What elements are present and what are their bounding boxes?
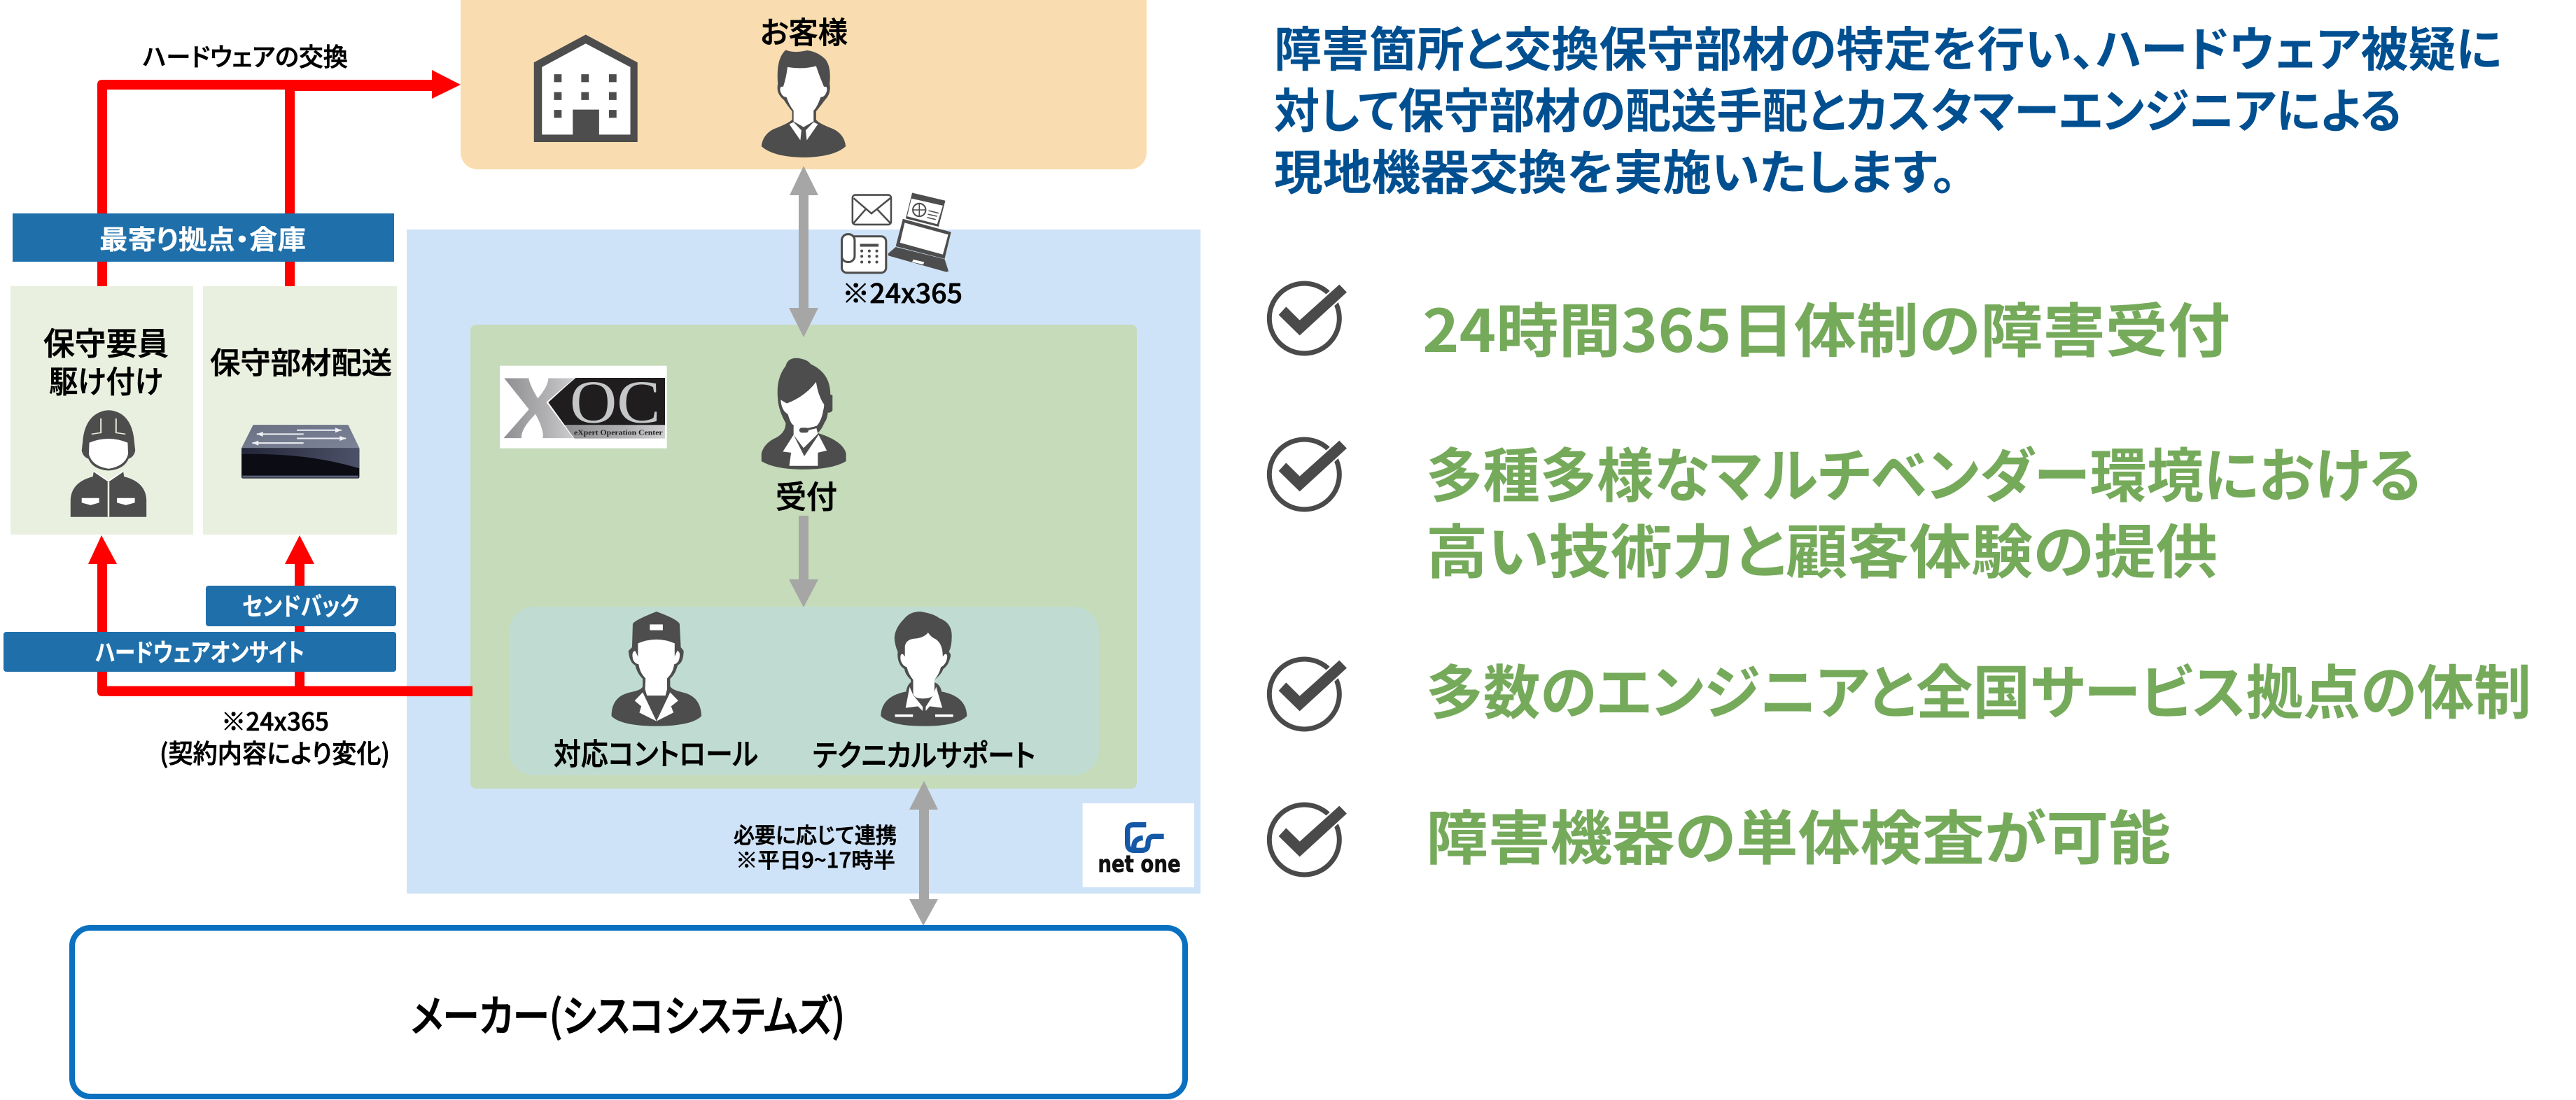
text: parts delivery: 保守部材配送: [210, 339, 392, 383]
heading: service summary: 障害箇所と交換保守部材の特定を行い、ハードウェア被疑に: [1274, 11, 2502, 80]
note: vendor cooperation: ※平日9~17時半: [736, 843, 895, 874]
icon: field worker: [71, 410, 146, 517]
icon: network switch: [241, 425, 359, 479]
icons: contact channels: [842, 193, 951, 273]
text: multi-vendor capability: 多種多様なマルチベンダー環境における: [1426, 430, 2421, 514]
note: onsite hours: [160, 703, 390, 770]
logo: net one: [1083, 803, 1194, 887]
bar: hardware onsite: ハードウェアオンサイト: [95, 633, 304, 669]
item: engineers and service bases: [1269, 647, 2531, 731]
text: device inspection: 障害機器の単体検査が可能: [1426, 792, 2171, 877]
bar: nearest base and warehouse: 最寄り拠点・倉庫: [99, 218, 306, 257]
icon: check: [1269, 439, 1347, 509]
panel: field engineer dispatch: [10, 286, 193, 535]
item: multi-vendor capability: [1269, 430, 2421, 591]
arrow: reception to support: [789, 516, 818, 607]
bar: nearest base and warehouse: [13, 213, 394, 262]
bar: send back: [206, 586, 396, 626]
icon: telephone: [842, 234, 886, 273]
note: vendor cooperation: 必要に応じて連携: [734, 818, 897, 849]
note: vendor cooperation: [734, 818, 897, 874]
panel: customer: [461, 0, 1147, 169]
panel: maker: メーカー(シスコシステムズ): [411, 981, 845, 1044]
text: multi-vendor capability: 高い技術力と顧客体験の提供: [1426, 506, 2218, 591]
icon: check: [1269, 659, 1347, 729]
panel: replacement parts delivery: [203, 286, 397, 535]
logo: net one: net one: [1098, 850, 1181, 877]
reception label: 受付: [776, 472, 837, 517]
panel: XOC operation center: [470, 325, 1137, 789]
logo: XOC: [500, 366, 667, 449]
control label: 対応コントロール: [554, 731, 758, 774]
item: 24/365 reception: [1269, 283, 2230, 369]
heading: service summary: [1274, 11, 2502, 204]
note: onsite hours: ※24x365: [221, 703, 329, 738]
icon: building: [534, 34, 638, 142]
icon: browser and laptop: [888, 193, 951, 272]
arrow: support to maker: [909, 781, 938, 926]
heading: service summary: 現地機器交換を実施いたします。: [1274, 134, 1956, 204]
panel: maker: [72, 928, 1185, 1097]
logo: XOC: eXpert Operation Center: [574, 429, 663, 437]
text: engineers and service bases: 多数のエンジニアと全国サービス拠点の体制: [1426, 647, 2531, 731]
icon: check: [1269, 805, 1347, 875]
icon: customer person: [762, 50, 846, 157]
panel: control and tech support: [509, 607, 1099, 775]
icon: control operator with cap: [612, 612, 701, 726]
red arrows: onsite and send-back from support: [88, 535, 472, 696]
note: onsite hours: (契約内容により変化): [160, 733, 390, 770]
heading: service summary: 対して保守部材の配送手配とカスタマーエンジニアによる: [1274, 73, 2402, 142]
customer label: お客様: [760, 9, 848, 52]
note: contact hours: ※24x365: [842, 272, 962, 311]
bar: hardware onsite: [4, 632, 396, 672]
icon: technical support person: [881, 612, 967, 726]
text: 24/365 reception: 24時間365日体制の障害受付: [1422, 285, 2230, 369]
logo: XOC: OC: [570, 367, 660, 435]
arrow: customer to reception: [789, 166, 818, 337]
label: hardware exchange: ハードウェアの交換: [143, 37, 348, 73]
icon: envelope: [853, 195, 891, 225]
red arrow: hardware exchange to customer: [97, 70, 461, 294]
text: dispatch: 駆け付け: [49, 357, 163, 402]
icon: check: [1269, 283, 1347, 353]
icon: receptionist with headset: [762, 358, 846, 470]
bar: send back: センドバック: [242, 586, 359, 623]
tech support label: テクニカルサポート: [813, 732, 1035, 775]
item: device inspection: [1269, 792, 2171, 877]
panel: net one service area: [407, 230, 1200, 894]
text: field engineer dispatch: 保守要員: [43, 318, 169, 364]
text: multi-vendor capability: [1426, 430, 2421, 591]
